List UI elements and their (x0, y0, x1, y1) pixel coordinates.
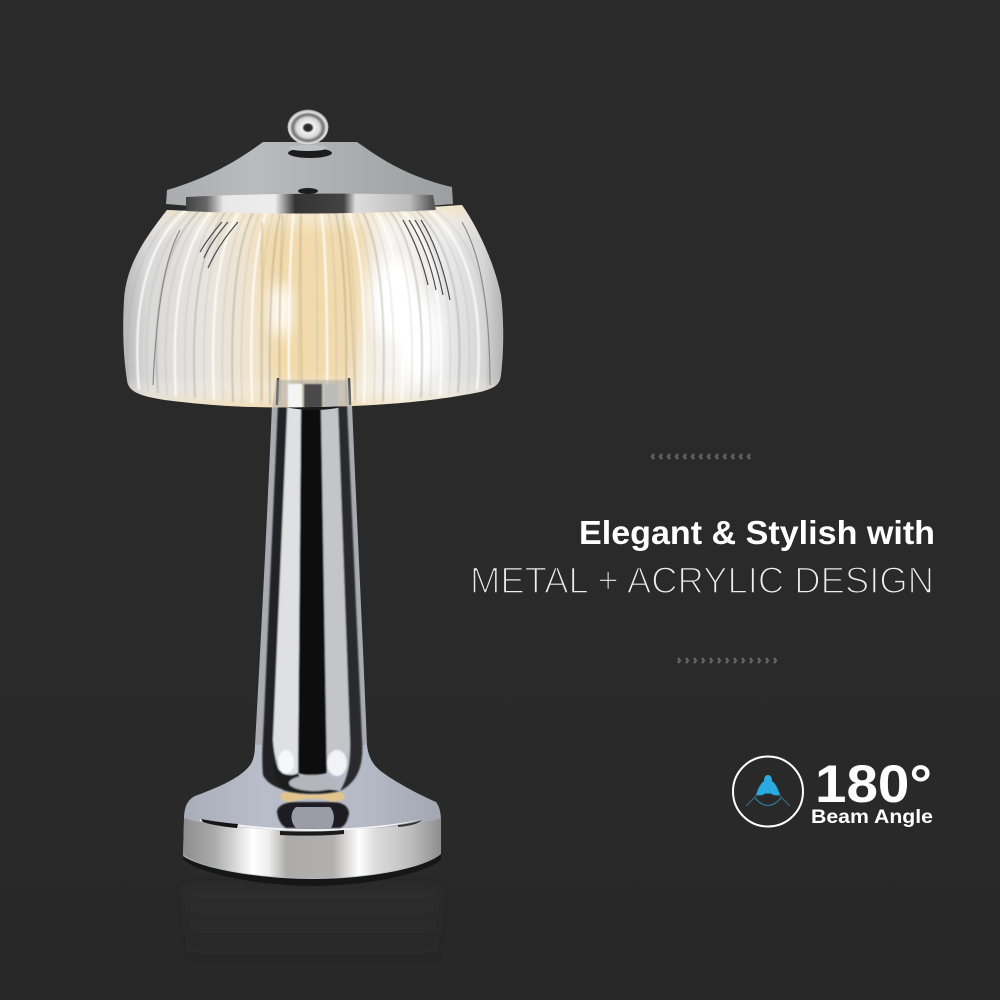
bright highlights (270, 258, 440, 385)
chevron divider bottom (678, 658, 776, 663)
label: beam angle: Beam Angle (811, 807, 933, 828)
icon: beam angle (733, 756, 803, 826)
shade ribs (127, 210, 489, 405)
gold bulb reflection (277, 792, 349, 828)
warm light bulb glow (258, 225, 368, 382)
lamp finial ball (288, 110, 328, 144)
stem seen through shade (272, 380, 352, 410)
heading line 2: METAL + ACRYLIC DESIGN (470, 560, 934, 601)
lamp reflection on floor (186, 886, 439, 962)
dark rib accents (153, 220, 490, 405)
lamp shade: ribbed acrylic (120, 200, 510, 415)
lamp cap (166, 142, 453, 214)
heading line 1: Elegant & Stylish with (579, 514, 935, 551)
lamp stem (255, 398, 367, 794)
lamp base (183, 745, 441, 886)
base side wall (183, 818, 441, 878)
product photo: table lamp (120, 110, 510, 886)
chevron divider top (652, 454, 750, 459)
label: 180 degrees: 180° (815, 755, 932, 814)
